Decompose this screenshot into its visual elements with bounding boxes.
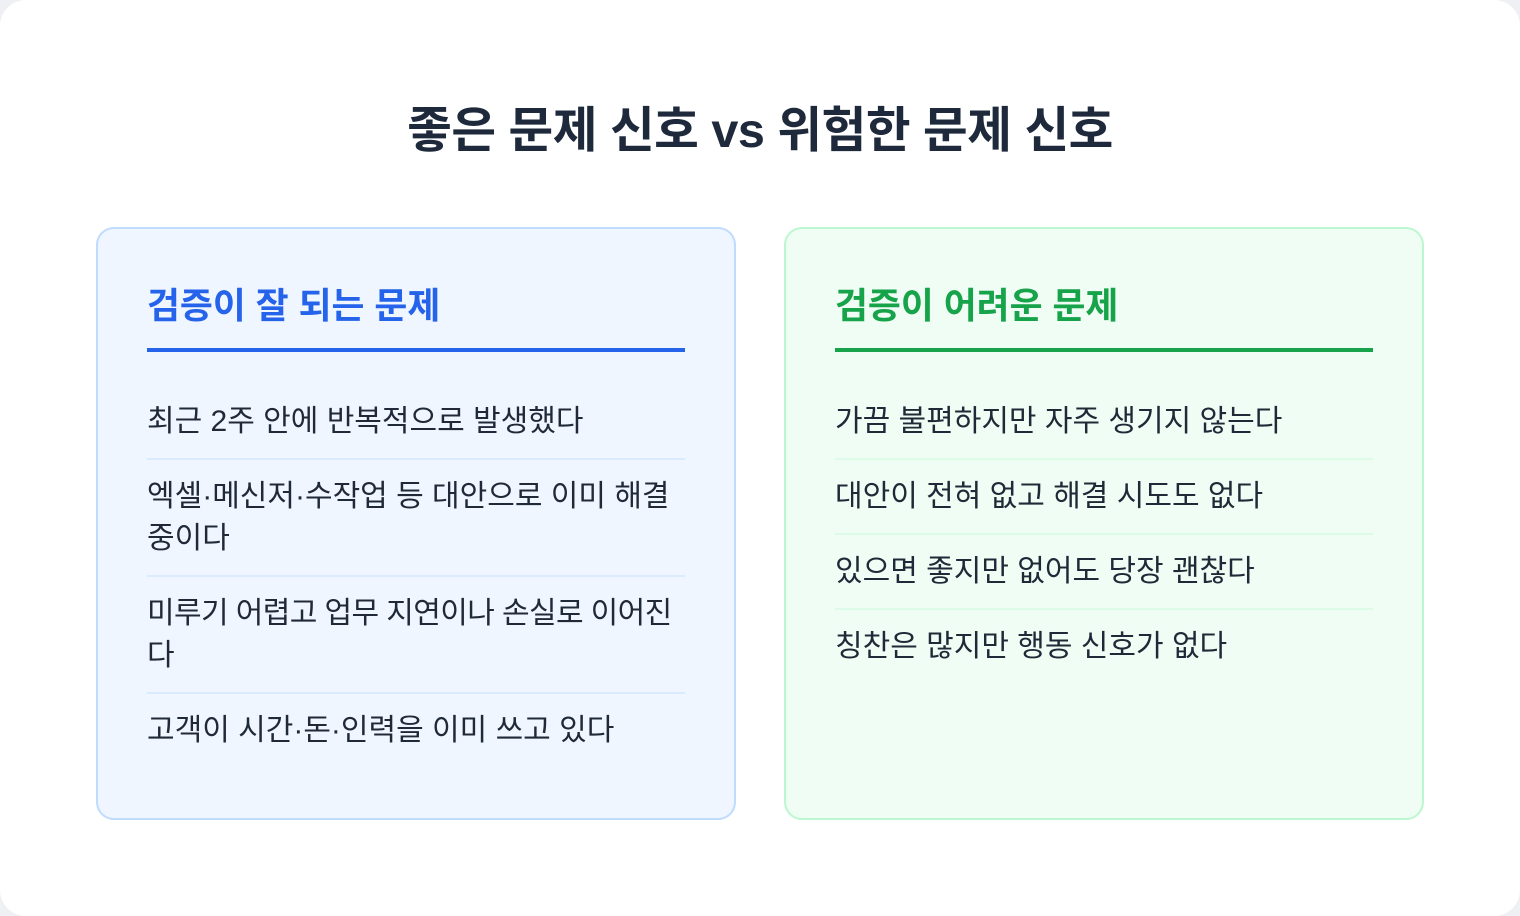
item bbox=[835, 460, 1373, 535]
item: 있으면 좋지만 없어도 당장 괜찮다 bbox=[835, 555, 1255, 588]
title: 좋은 문제 신호 vs 위험한 문제 신호 bbox=[407, 104, 1113, 158]
item: 미루기 어렵고 업무 지연이나 손실로 이어진다 bbox=[147, 597, 672, 672]
item bbox=[147, 577, 685, 694]
item bbox=[835, 401, 1373, 460]
item: 엑셀·메신저·수작업 등 대안으로 이미 해결 중이다 bbox=[147, 480, 670, 555]
item bbox=[147, 460, 685, 577]
item bbox=[147, 401, 685, 460]
panel: good problems bbox=[96, 227, 736, 820]
item: 최근 2주 안에 반복적으로 발생했다 bbox=[147, 405, 583, 438]
panel: hard problems bbox=[784, 227, 1424, 820]
item: 고객이 시간·돈·인력을 이미 쓰고 있다 bbox=[147, 714, 614, 747]
item: 가끔 불편하지만 자주 생기지 않는다 bbox=[835, 405, 1282, 438]
heading: good: 검증이 잘 되는 문제 bbox=[147, 286, 440, 326]
item: 대안이 전혀 없고 해결 시도도 없다 bbox=[835, 480, 1263, 513]
item: 칭찬은 많지만 행동 신호가 없다 bbox=[835, 630, 1227, 663]
list: good signals bbox=[147, 405, 685, 747]
heading: good bbox=[147, 281, 685, 352]
item bbox=[835, 535, 1373, 610]
heading: hard: 검증이 어려운 문제 bbox=[835, 286, 1118, 326]
heading: hard bbox=[835, 281, 1373, 352]
list: risky signals bbox=[835, 405, 1373, 663]
